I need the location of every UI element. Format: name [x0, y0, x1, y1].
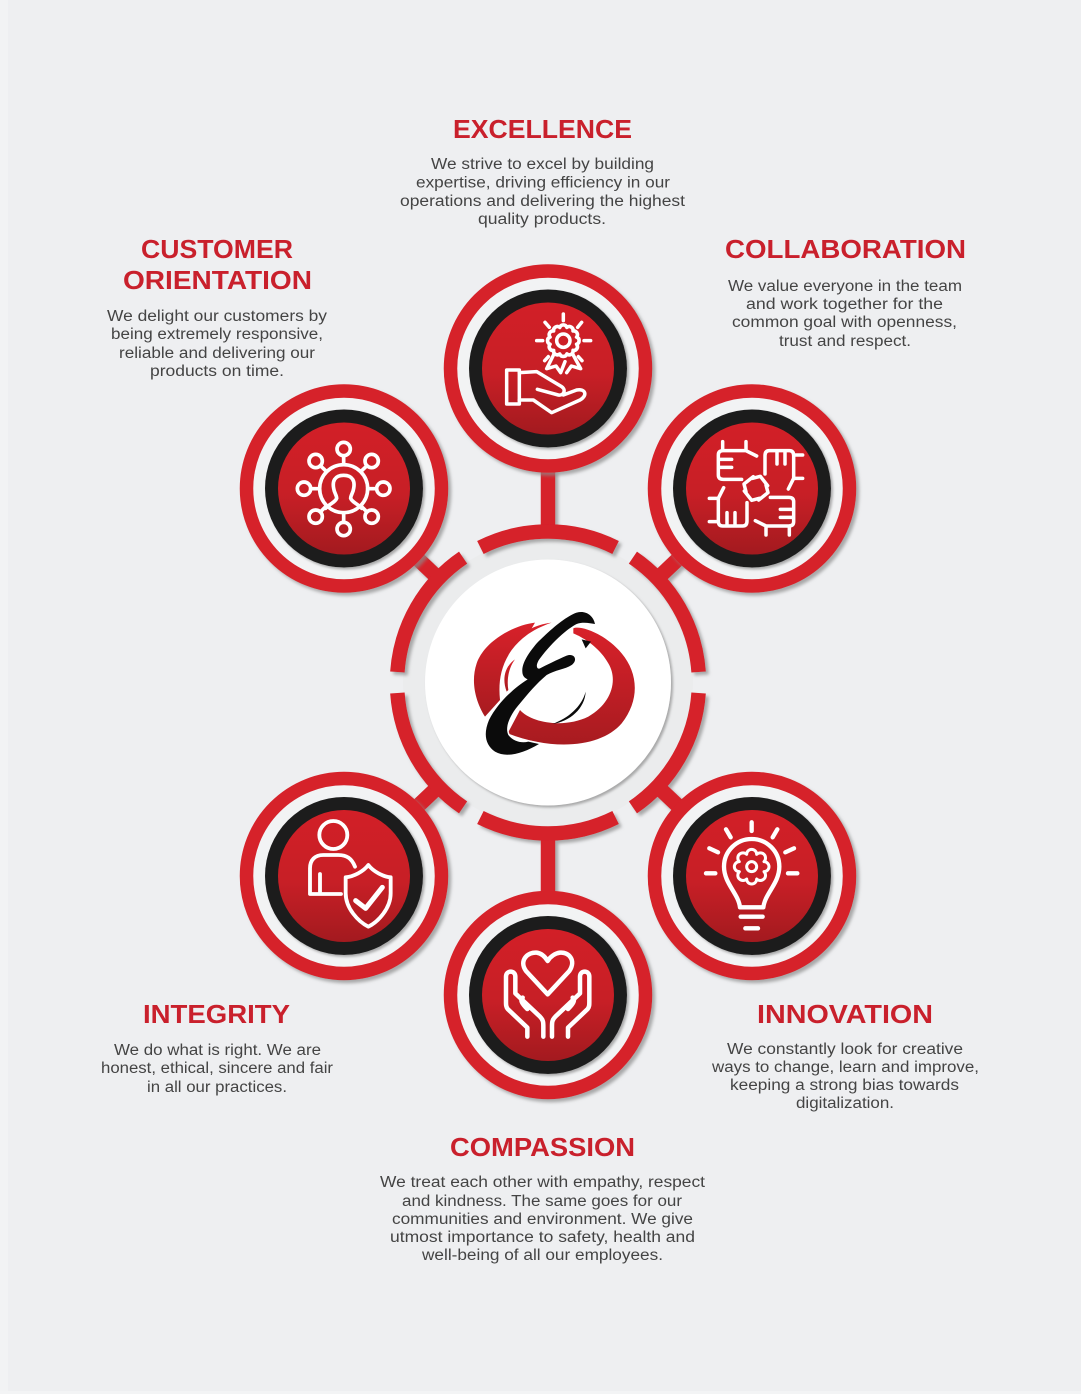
heading: customer orientation — [123, 234, 312, 295]
text: excellence description — [400, 156, 686, 228]
black disc: compassion — [469, 916, 627, 1074]
text: integrity description: honest, ethical, sincere and fair — [101, 1060, 333, 1077]
heading: compassion: COMPASSION — [450, 1132, 635, 1162]
ring: integrity — [246, 778, 442, 974]
text: customer orientation description: We delight our customers by — [107, 308, 327, 325]
black disc: integrity — [265, 797, 423, 955]
icon: light bulb with gear — [706, 822, 797, 928]
red disc: compassion — [482, 929, 614, 1061]
icon: customer network — [297, 442, 390, 536]
red disc: customer orientation — [278, 422, 410, 554]
text: excellence description: quality products. — [478, 211, 606, 228]
icon: hands holding heart — [506, 953, 589, 1037]
text: innovation description: digitalization. — [796, 1095, 894, 1112]
text: innovation description — [711, 1041, 979, 1112]
white centre disc — [425, 560, 671, 806]
panel: integrity — [101, 778, 442, 1096]
text: compassion description: well-being of all our employees. — [421, 1247, 663, 1264]
ring: innovation — [654, 778, 850, 974]
icon: four joined hands — [709, 442, 803, 535]
text: excellence description: expertise, driving efficiency in our — [416, 174, 670, 192]
text: innovation description: keeping a strong bias towards — [730, 1077, 959, 1094]
text: collaboration description: common goal with openness, — [732, 314, 957, 331]
text: compassion description: and kindness. The same goes for our — [402, 1193, 682, 1210]
text: innovation description: ways to change, learn and improve, — [711, 1059, 979, 1076]
icon: hand with award — [507, 314, 591, 413]
heading: integrity: INTEGRITY — [143, 999, 290, 1029]
heading: excellence: EXCELLENCE — [453, 114, 632, 144]
panel: customer orientation — [107, 234, 442, 586]
text: customer orientation description: being extremely responsive, — [111, 326, 323, 343]
panel: innovation — [654, 778, 979, 1112]
ring: excellence — [450, 271, 646, 466]
ring: customer orientation — [246, 391, 442, 586]
text: collaboration description — [728, 278, 962, 350]
text: collaboration description: We value everyone in the team — [728, 278, 962, 295]
logo — [474, 612, 635, 755]
red disc: innovation — [686, 810, 818, 942]
heading: customer orientation: CUSTOMER — [141, 234, 293, 264]
text: compassion description: We treat each other with empathy, respect — [380, 1174, 706, 1191]
red disc: integrity — [278, 810, 410, 942]
text: compassion description — [380, 1174, 706, 1264]
hub connectors and arcs — [397, 470, 699, 895]
ring: collaboration — [654, 391, 850, 586]
ring: compassion — [450, 898, 646, 1092]
red disc: collaboration — [686, 422, 818, 554]
text: customer orientation description — [107, 308, 327, 380]
text: integrity description: We do what is right. We are — [114, 1042, 321, 1059]
text: compassion description: communities and environment. We give — [392, 1211, 693, 1228]
heading: customer orientation: ORIENTATION — [123, 265, 312, 295]
heading: innovation: INNOVATION — [757, 999, 933, 1029]
icon: person with shield — [310, 821, 391, 927]
text: compassion description: utmost importance to safety, health and — [390, 1229, 695, 1246]
text: innovation description: We constantly look for creative — [727, 1041, 963, 1058]
black disc: excellence — [469, 290, 627, 448]
heading: collaboration: COLLABORATION — [725, 234, 966, 264]
central hub — [397, 470, 699, 895]
panel: collaboration — [654, 234, 966, 586]
black disc: innovation — [673, 797, 831, 955]
panel: compassion — [380, 898, 706, 1264]
black disc: customer orientation — [265, 410, 423, 568]
text: customer orientation description: reliable and delivering our — [119, 345, 315, 362]
text: collaboration description: trust and respect. — [779, 333, 911, 350]
black disc: collaboration — [673, 410, 831, 568]
text: integrity description: in all our practices. — [147, 1079, 287, 1096]
text: excellence description: We strive to excel by building — [431, 156, 654, 173]
red disc: excellence — [482, 302, 614, 434]
text: collaboration description: and work together for the — [746, 296, 943, 313]
text: excellence description: operations and delivering the highest — [400, 193, 686, 210]
text: customer orientation description: products on time. — [150, 363, 284, 380]
text: integrity description — [101, 1042, 333, 1096]
panel: excellence — [400, 114, 686, 466]
